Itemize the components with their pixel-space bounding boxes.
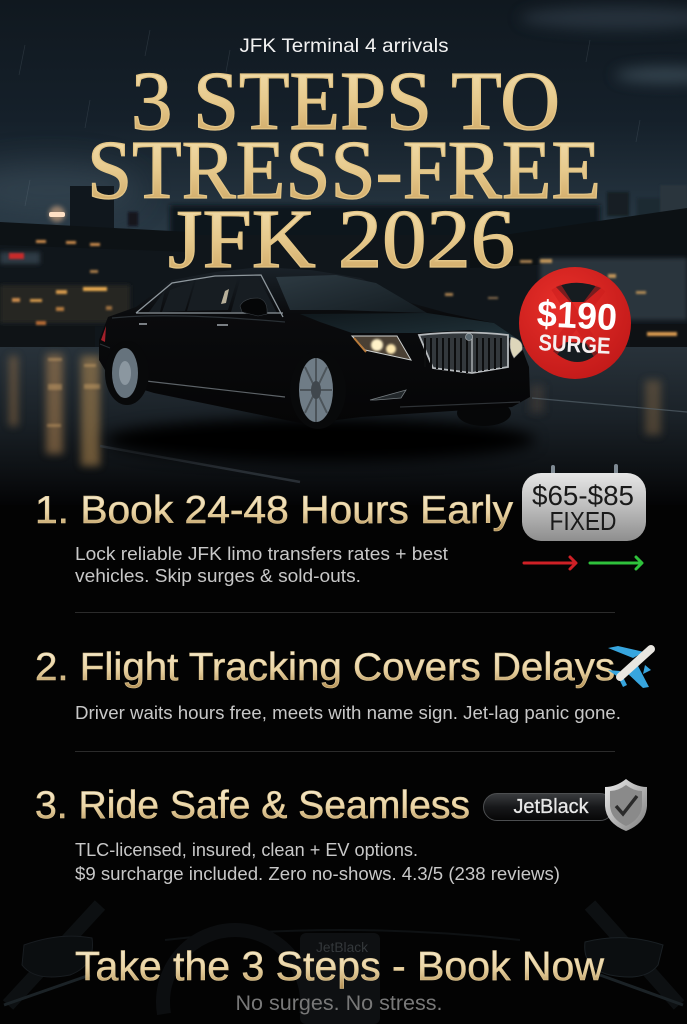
title line 2: STRESS-FREE xyxy=(87,124,601,217)
car: window chrome xyxy=(136,275,283,317)
car: window reflection xyxy=(221,289,229,304)
car: right headlight xyxy=(510,337,522,358)
panel backdrop: steps area xyxy=(0,505,687,1024)
city lights xyxy=(9,240,677,336)
car: door handles xyxy=(139,324,228,325)
step 3 xyxy=(35,784,560,884)
step 1 heading: 1. Book 24-48 Hours Early xyxy=(35,489,514,532)
elevated highway overpass xyxy=(0,208,687,350)
car: sill chrome xyxy=(146,381,285,397)
price tag: $65-$85 fixed: $65-$85 xyxy=(532,480,634,511)
badge: $190 surge crossed out xyxy=(519,267,631,379)
eyebrow: JFK Terminal 4 arrivals: JFK Terminal 4 arrivals xyxy=(240,36,448,57)
badge label: SURGE xyxy=(538,329,611,359)
wet road with reflections xyxy=(0,347,687,507)
centre display xyxy=(300,933,380,1024)
arrow: green xyxy=(590,557,642,569)
step 3 body: TLC-licensed, insured, clean + EV options. xyxy=(75,840,418,860)
pill: JetBlack: JetBlack xyxy=(514,796,589,818)
title line 1: 3 STEPS TO xyxy=(131,55,560,148)
car: hood sheen xyxy=(300,313,519,340)
steering wheel xyxy=(163,930,307,1014)
car: left headlight xyxy=(352,336,411,360)
car: front wheel xyxy=(290,351,346,429)
car: body shine xyxy=(100,316,285,348)
step 3 body xyxy=(75,840,560,884)
left wing mirror xyxy=(22,936,93,977)
step 2 heading: 2. Flight Tracking Covers Delays xyxy=(35,646,615,689)
pill: JetBlack xyxy=(484,794,614,820)
car: fog vent xyxy=(370,390,406,400)
car: body shell xyxy=(99,267,530,424)
display label: JetBlack xyxy=(316,940,368,955)
right wing mirror xyxy=(585,938,663,977)
skyline: left tower xyxy=(49,186,600,245)
car: taillight xyxy=(101,326,106,342)
price tag: $65-$85 fixed xyxy=(522,464,646,541)
limousine xyxy=(99,267,530,429)
step 2 xyxy=(35,646,621,723)
car: far front tyre xyxy=(457,400,511,426)
badge price: $190 xyxy=(536,293,618,338)
price tag: $65-$85 fixed: FIXED xyxy=(550,506,616,536)
step 1 xyxy=(35,489,514,586)
step 2 body: Driver waits hours free, meets with name sign. Jet-lag panic gone. xyxy=(75,703,621,723)
car: grille xyxy=(419,332,508,373)
car: windshield xyxy=(276,275,427,313)
icon: shield with check xyxy=(605,779,647,831)
icon: airplane xyxy=(608,646,651,688)
arrow: red xyxy=(524,557,576,569)
car: rear wheel xyxy=(105,341,149,405)
title line 3: JFK 2026 xyxy=(168,193,515,286)
call to action heading: Take the 3 Steps - Book Now xyxy=(75,943,604,989)
title xyxy=(87,55,601,286)
car: bumper line xyxy=(400,402,520,407)
step 3 heading: 3. Ride Safe & Seamless xyxy=(35,784,470,827)
call to action subline: No surges. No stress. xyxy=(236,992,442,1015)
skyline: right towers xyxy=(607,185,687,270)
car: side windows xyxy=(149,277,277,313)
step 1 body: vehicles. Skip surges & sold-outs. xyxy=(75,566,361,586)
background: stormy night sky xyxy=(0,0,687,240)
car: side mirror xyxy=(240,298,267,316)
step 3 body: $9 surcharge included. Zero no-shows. 4.3/5 (238 reviews) xyxy=(75,864,560,884)
dashboard interior backdrop xyxy=(4,905,683,1024)
step 1 body xyxy=(75,544,448,586)
step 1 body: Lock reliable JFK limo transfers rates + best xyxy=(75,544,448,564)
